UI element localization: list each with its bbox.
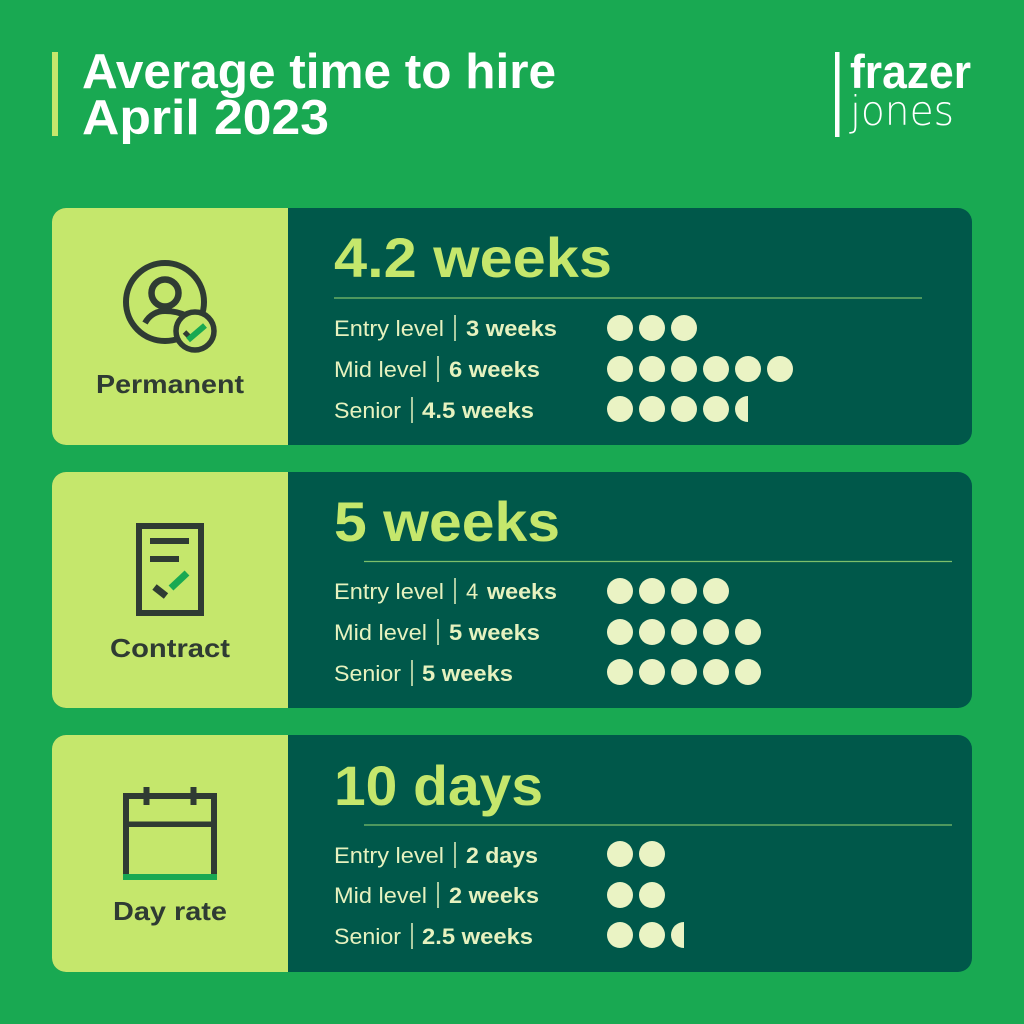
panel: permanent (52, 208, 972, 445)
title: April 2023 (82, 91, 329, 145)
label: day rate: Day rate (113, 896, 227, 926)
row: mid level: Mid level (334, 357, 427, 382)
panel: contract (52, 472, 972, 708)
row: senior (334, 923, 533, 949)
dots: 2.5 weeks (607, 922, 684, 948)
row: mid level (334, 619, 540, 645)
headline: 5 weeks: 5 weeks (334, 490, 560, 553)
row: senior: Senior (334, 924, 401, 949)
panel background: dark (52, 208, 972, 445)
panel side: lime (52, 208, 288, 445)
row: senior: Senior (334, 398, 401, 423)
panel side: lime (52, 735, 288, 972)
row: entry level: Entry level (334, 579, 444, 604)
dots: 2 days (607, 841, 665, 867)
icon: person with check (126, 263, 214, 350)
row: entry level: Entry level (334, 316, 444, 341)
row: entry level: 2 days (466, 843, 538, 868)
row: senior: Senior (334, 661, 401, 686)
logo: frazer jones: frazer (850, 45, 971, 98)
icon: calendar (123, 787, 217, 880)
dots: 5 weeks (607, 619, 761, 645)
row: senior: 2.5 weeks (422, 924, 533, 949)
row: mid level (334, 356, 540, 382)
row: entry level: 3 weeks (466, 316, 557, 341)
row: senior: 5 weeks (422, 661, 513, 686)
headline: 10 days: 10 days (334, 754, 543, 817)
row: mid level: Mid level (334, 883, 427, 908)
panel background: dark (52, 735, 972, 972)
panel side: lime (52, 472, 288, 708)
row: entry level (334, 842, 538, 868)
dots: 4 weeks (607, 578, 729, 604)
row: entry level: weeks (486, 579, 557, 604)
row: senior (334, 397, 534, 423)
row: mid level: 6 weeks (449, 357, 540, 382)
row: entry level (334, 315, 557, 341)
logo: frazer jones (835, 45, 971, 137)
logo: frazer jones: jones (849, 87, 954, 135)
dots: 6 weeks (607, 356, 793, 382)
row: mid level: 5 weeks (449, 620, 540, 645)
panel background: dark (52, 472, 972, 708)
title (82, 45, 556, 145)
headline: 4.2 weeks: 4.2 weeks (334, 226, 612, 289)
dots: 3 weeks (607, 315, 697, 341)
row: mid level (334, 882, 539, 908)
icon: contract document (139, 526, 201, 613)
dots: 5 weeks (607, 659, 761, 685)
panel: day rate (52, 735, 972, 972)
row: senior: 4.5 weeks (422, 398, 534, 423)
title: Average time to hire (82, 45, 556, 99)
row: mid level: 2 weeks (449, 883, 539, 908)
dots: 4.5 weeks (607, 396, 761, 422)
label: permanent: Permanent (96, 369, 244, 399)
row: entry level: 4 (466, 579, 478, 604)
row: entry level: Entry level (334, 843, 444, 868)
label: contract: Contract (110, 633, 230, 663)
dots: 2 weeks (607, 882, 665, 908)
row: entry level (334, 578, 557, 604)
title accent bar (52, 52, 58, 136)
row: mid level: Mid level (334, 620, 427, 645)
row: senior (334, 660, 513, 686)
